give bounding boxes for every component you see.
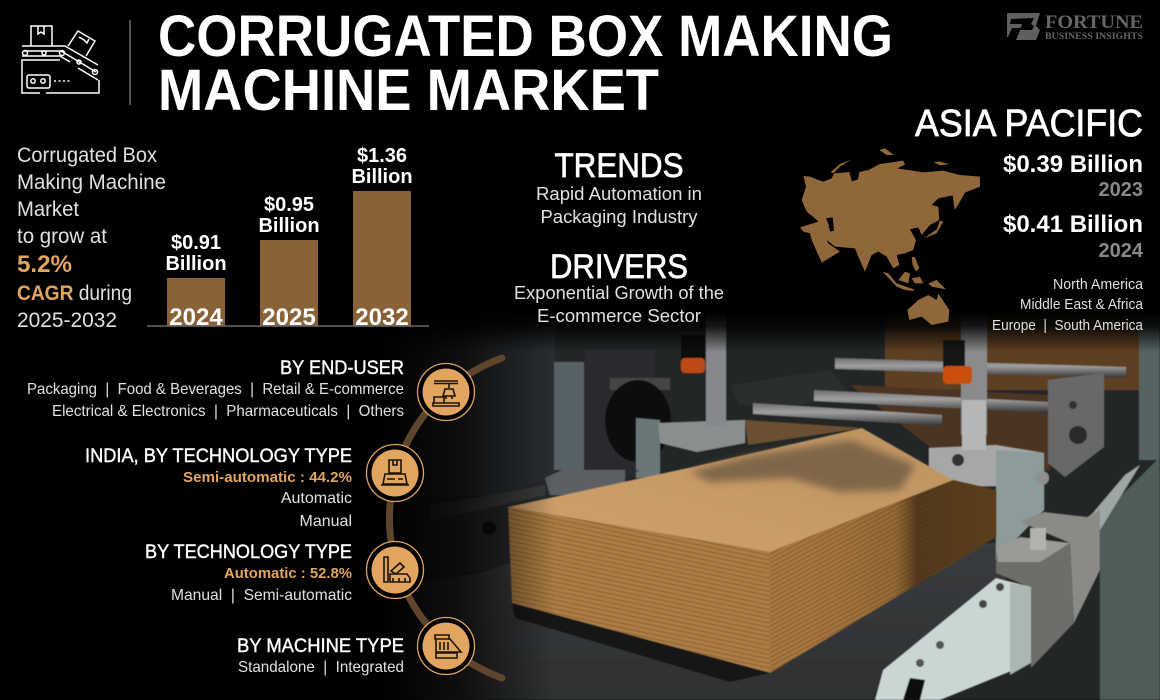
text: CAGR summary: 5.2% (17, 251, 72, 278)
icon: packed box on machine (366, 444, 424, 502)
region: Asia Pacific stats: $0.39 Billion (1003, 151, 1143, 178)
bar chart (147, 145, 429, 331)
bar 2025: $0.95 (264, 194, 314, 216)
bar 2032: Billion (351, 166, 413, 188)
bar 2024: $0.91 (171, 232, 221, 254)
segment: by technology type: Automatic : 52.8% (224, 565, 352, 582)
divider (129, 20, 131, 105)
segment: India by technology type: Manual (300, 513, 352, 530)
region: Asia Pacific stats: ASIA PACIFIC (915, 103, 1143, 145)
logo: Fortune Business Insights (1007, 12, 1143, 42)
segment: by machine type (237, 636, 404, 676)
title: MACHINE MARKET (158, 58, 659, 123)
bar 2025: 2025 (262, 304, 316, 331)
region: Asia Pacific stats: Europe | South America (992, 317, 1144, 334)
segment: by end-user (27, 358, 404, 420)
photo: cardboard stack (508, 428, 996, 673)
title: CORRUGATED BOX MAKING (158, 4, 893, 69)
photo fade overlays (0, 290, 1160, 700)
text: CAGR summary: Making Machine (17, 171, 166, 194)
trends: TRENDS (554, 147, 684, 185)
segment: by technology type: BY TECHNOLOGY TYPE (145, 542, 352, 563)
trends: Packaging Industry (540, 207, 698, 227)
bar 2025: Billion (258, 215, 320, 237)
segment: by end-user: Electrical & Electronics | Pharmaceuticals | Others (52, 403, 404, 420)
drivers: DRIVERS (550, 248, 688, 286)
text: CAGR summary: Market (17, 198, 79, 221)
bar 2024: Billion (165, 253, 227, 275)
region: Asia Pacific stats: North America (1053, 276, 1144, 293)
title (158, 4, 893, 123)
drivers: Exponential Growth of the (514, 283, 724, 303)
segment: by technology type (145, 542, 352, 604)
bar 2025 (258, 194, 320, 331)
text: CAGR summary: Corrugated Box (17, 144, 157, 167)
segment: by machine type: BY MACHINE TYPE (237, 636, 404, 657)
text: CAGR summary: 2025-2032 (17, 309, 117, 332)
bar 2024 (165, 232, 227, 331)
icon: box conveyor header icon (22, 26, 99, 93)
segment: by end-user: Packaging | Food & Beverages | Retail & E-commerce (27, 381, 404, 398)
logo: Fortune Business Insights: FORTUNE (1045, 12, 1143, 33)
bar 2032: $1.36 (357, 145, 407, 167)
text: CAGR summary: CAGR during (17, 282, 132, 305)
bar 2032: 2032 (355, 304, 409, 331)
drivers (514, 248, 724, 326)
trends (536, 147, 702, 227)
segment: by technology type: Manual | Semi-automatic (171, 587, 352, 604)
photo: foreground machine brackets (875, 510, 1100, 700)
segment: by machine type: Standalone | Integrated (238, 659, 404, 676)
map: Asia Pacific (800, 148, 980, 325)
trends: Rapid Automation in (536, 184, 702, 204)
icon: machine press (418, 618, 474, 674)
photo: corrugated board stack on machine (380, 300, 1160, 700)
segment: India by technology type: Automatic (281, 490, 352, 507)
icon: conveyor tower (366, 542, 424, 598)
icon: robot arm (418, 364, 474, 420)
region: Asia Pacific stats: 2024 (1098, 240, 1144, 262)
segment: India by technology type (85, 446, 352, 530)
segment: India by technology type: Semi-automatic : 44.2% (183, 469, 352, 486)
text: CAGR summary: to grow at (17, 225, 107, 248)
drivers: E-commerce Sector (537, 306, 701, 326)
region: Asia Pacific stats (915, 103, 1144, 334)
segment: by end-user: BY END-USER (280, 358, 404, 379)
bar 2024: 2024 (169, 304, 223, 331)
region: Asia Pacific stats: Middle East & Africa (1020, 296, 1144, 313)
segment: India by technology type: INDIA, BY TECHNOLOGY TYPE (85, 446, 352, 467)
text: CAGR summary (17, 144, 166, 332)
region: Asia Pacific stats: $0.41 Billion (1003, 211, 1143, 238)
logo: Fortune Business Insights: BUSINESS INSIGHTS (1045, 32, 1143, 42)
arc connector (389, 358, 502, 678)
bar 2032 (351, 145, 413, 331)
region: Asia Pacific stats: 2023 (1098, 179, 1143, 201)
